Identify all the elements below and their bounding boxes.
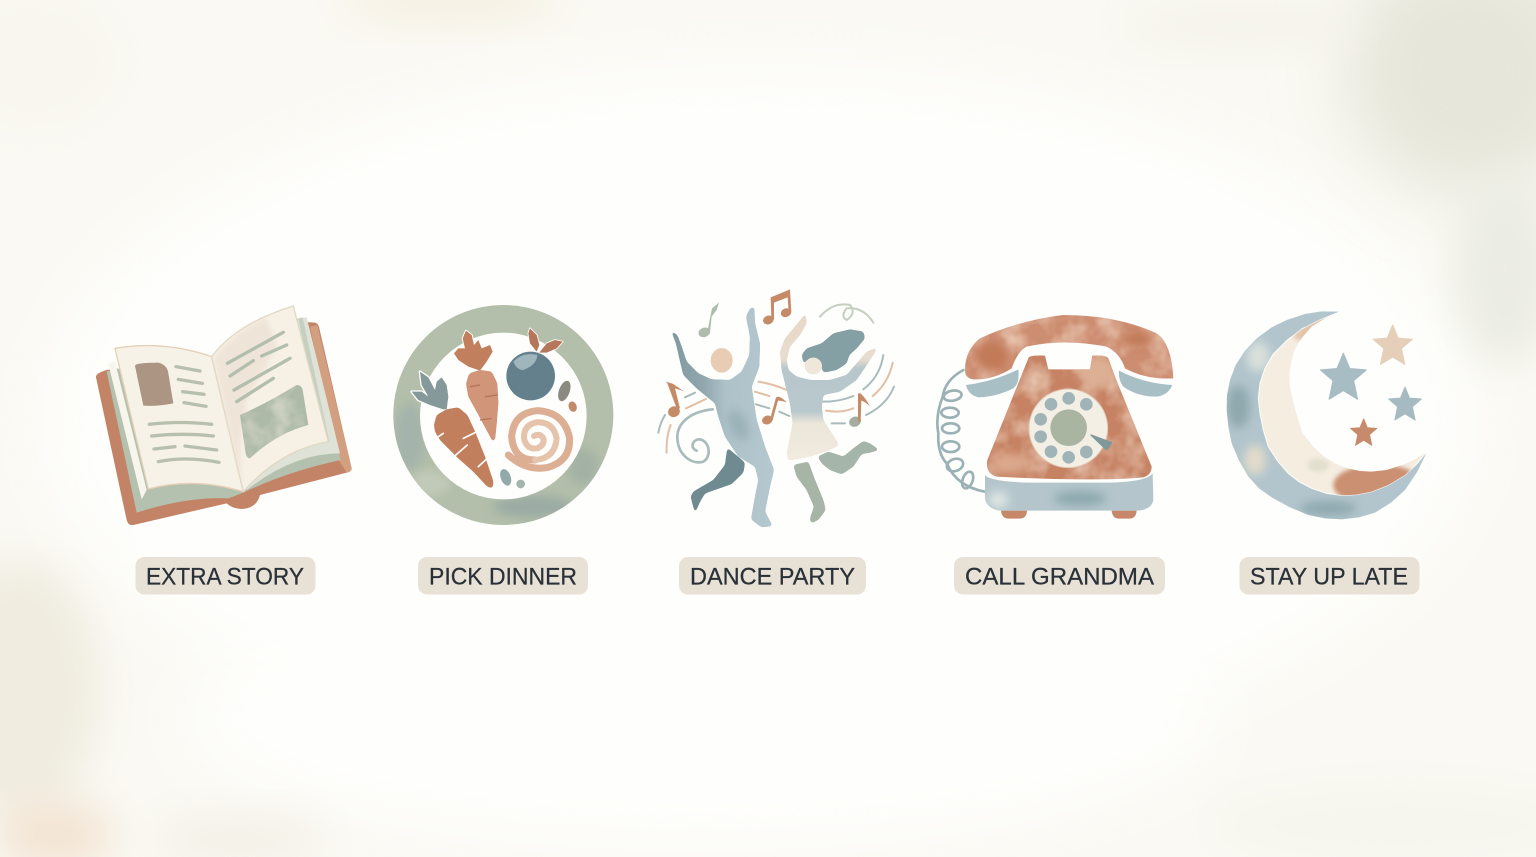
right picture (240, 385, 308, 458)
swooshes and spirals (658, 304, 894, 462)
swirl (508, 411, 570, 468)
handset (965, 315, 1173, 397)
label: stay up late: STAY UP LATE (1250, 564, 1408, 590)
dancer: woman body (780, 313, 878, 461)
carrot: small (454, 331, 498, 442)
rotary dial (1029, 389, 1112, 468)
icon: open book (96, 306, 352, 525)
dancer: man head (711, 348, 733, 373)
item: stay up late (1227, 311, 1427, 594)
right page (212, 306, 328, 492)
star: beige (1373, 325, 1412, 364)
music note: left (666, 382, 683, 419)
label: dance party (679, 557, 866, 594)
dancer: back leg (691, 448, 745, 513)
moon inner crescent (1258, 312, 1427, 506)
earpieces (966, 369, 1172, 397)
page block (107, 317, 341, 513)
right text lines (227, 332, 290, 402)
item: dance party (658, 289, 894, 594)
coiled cord (937, 370, 985, 492)
label: extra story (136, 557, 316, 594)
moon outer crescent (1227, 311, 1427, 519)
label: call grandma (954, 557, 1165, 594)
label: pick dinner: PICK DINNER (429, 564, 577, 590)
left page (115, 346, 243, 492)
icon: dinner plate (393, 305, 613, 525)
left picture (135, 363, 173, 406)
music note: right (848, 393, 870, 428)
dancer: man body (671, 307, 774, 527)
music note: double (762, 289, 792, 326)
carrot: large (412, 372, 493, 488)
phone feet (1001, 511, 1137, 519)
dancer: woman head and hair (802, 329, 865, 374)
label: call grandma: CALL GRANDMA (965, 564, 1155, 590)
icon: rotary telephone (937, 315, 1173, 519)
plate centre (420, 333, 587, 499)
label: extra story: EXTRA STORY (146, 564, 304, 590)
phone body (987, 355, 1152, 479)
seeds (498, 379, 578, 488)
item: extra story (96, 306, 352, 594)
finger stop (1091, 435, 1112, 450)
book cover (96, 322, 352, 525)
label: dance party: DANCE PARTY (690, 564, 855, 590)
icon: crescent moon and stars (1227, 311, 1427, 519)
phone base (985, 473, 1153, 511)
item: pick dinner (393, 305, 613, 594)
star: terracotta (1350, 419, 1377, 445)
blueberry (506, 328, 563, 400)
star: small blue (1389, 387, 1421, 420)
label: stay up late (1240, 557, 1420, 594)
left text lines (149, 367, 219, 462)
label: pick dinner (418, 557, 588, 594)
music note: middle (761, 397, 787, 426)
dancer: woman legs (793, 441, 879, 523)
icon: dancers and music notes (658, 289, 894, 527)
item: call grandma (937, 315, 1173, 594)
berry leaves (528, 328, 539, 352)
star: large blue (1321, 353, 1366, 399)
music note: sage (697, 303, 719, 339)
plate rim (393, 305, 613, 525)
